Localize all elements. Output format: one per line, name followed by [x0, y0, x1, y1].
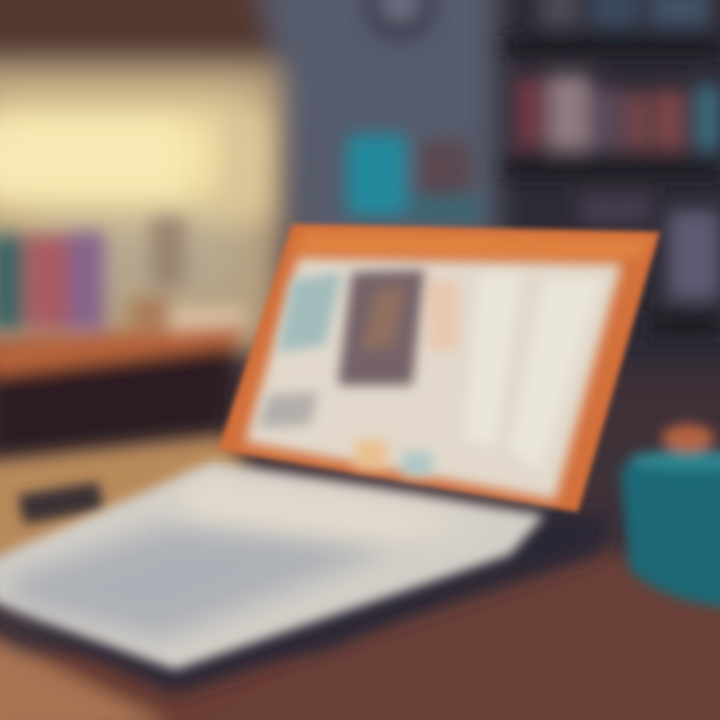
- bookshelf: [505, 0, 720, 335]
- laptop: [0, 224, 660, 694]
- teal mug: [620, 424, 720, 608]
- screen contents: [258, 270, 600, 476]
- laptop screen frame: [218, 224, 660, 512]
- wall light glow: [0, 100, 250, 305]
- teal cup on back shelf: [347, 134, 480, 221]
- background wall: [0, 0, 720, 370]
- keyboard keys: [0, 525, 400, 640]
- keyboard deck: [0, 462, 545, 670]
- wall clock: [364, 0, 436, 41]
- phone on desk: [18, 482, 104, 524]
- desk top: [0, 435, 720, 720]
- shelf with books: [0, 218, 245, 460]
- screen panel: [245, 258, 622, 500]
- laptop base shadow: [0, 510, 610, 694]
- screen highlight: [295, 232, 650, 258]
